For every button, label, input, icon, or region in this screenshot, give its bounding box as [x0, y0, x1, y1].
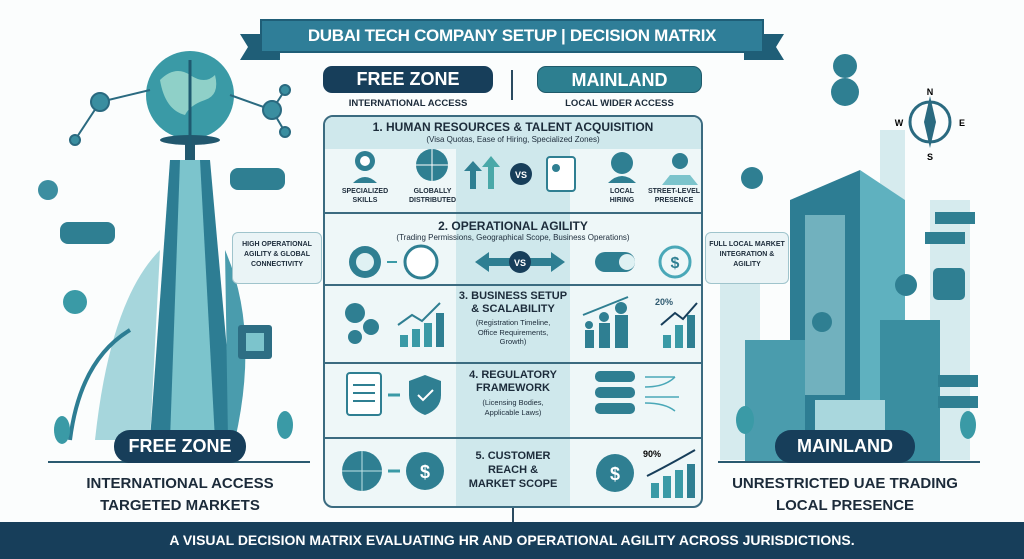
label: free zone [114, 430, 246, 463]
globe [146, 51, 234, 160]
row 3: business setup [345, 290, 698, 348]
label: mainland [775, 430, 915, 463]
header: mainland: LOCAL WIDER ACCESS [565, 98, 674, 109]
row 3: business setup: (Registration Timeline, [476, 318, 550, 327]
footer: A VISUAL DECISION MATRIX EVALUATING HR AND OPERATIONAL AGILITY ACROSS JURISDICTIONS. [169, 532, 855, 548]
callout: right [705, 232, 789, 284]
text: mainland summary: UNRESTRICTED UAE TRADING [732, 475, 958, 492]
label: free zone: FREE ZONE [128, 436, 232, 456]
header: mainland [537, 66, 702, 109]
row 4: regulatory [346, 369, 679, 416]
callout: left [232, 232, 322, 284]
footer [0, 522, 1024, 559]
pins [741, 54, 917, 332]
text: mainland summary [732, 475, 958, 514]
row 5: customer reach: 5. CUSTOMER [476, 450, 550, 462]
network nodes [70, 85, 290, 145]
compass: E [959, 118, 965, 128]
row 1: HR: SPECIALIZED SKILLS [342, 188, 388, 204]
row 2: operational agility: $ [671, 255, 680, 272]
row 1: HR: GLOBALLY DISTRIBUTED [409, 188, 456, 204]
row 4: regulatory: Applicable Laws) [485, 408, 541, 416]
header: free zone: INTERNATIONAL ACCESS [349, 98, 467, 109]
row 2: operational agility: 2. OPERATIONAL AGILITY [438, 219, 588, 233]
row 3: business setup: & SCALABILITY [471, 303, 555, 315]
row 5: customer reach: 90% [643, 449, 661, 459]
row 1: HR [342, 120, 700, 204]
tower [70, 60, 245, 440]
callout: left: HIGH OPERATIONAL AGILITY & GLOBAL CONNECTIVITY [242, 241, 312, 268]
row 3: business setup: 3. BUSINESS SETUP [459, 290, 567, 302]
text: mainland summary: LOCAL PRESENCE [776, 497, 914, 514]
compass: W [895, 118, 904, 128]
right illustration [718, 54, 980, 462]
row 4: regulatory: (Licensing Bodies, [482, 398, 544, 407]
chip [238, 325, 272, 359]
header: free zone: FREE ZONE [356, 69, 460, 89]
row 4: regulatory: FRAMEWORK [476, 382, 550, 394]
compass: S [927, 152, 933, 162]
row 3: business setup: 20% [655, 297, 673, 307]
row 5: customer reach: $ [420, 462, 430, 482]
row 2: operational agility: (Trading Permissions, Geographical Scope, Business Operations) [396, 233, 630, 242]
row 2: operational agility: VS [514, 258, 526, 268]
matrix panel [323, 115, 703, 508]
header: mainland: MAINLAND [572, 70, 668, 90]
row 1: HR: LOCAL HIRING [610, 188, 634, 204]
callout: right: FULL LOCAL MARKET INTEGRATION & AGILITY [709, 241, 785, 268]
row 5: customer reach: $ [610, 464, 620, 484]
label: mainland: MAINLAND [797, 436, 893, 456]
row 5: customer reach [342, 449, 696, 498]
compass: N [927, 87, 933, 97]
row 2: operational agility [349, 219, 692, 280]
title banner: DUBAI TECH COMPANY SETUP | DECISION MATRIX [308, 26, 716, 45]
header: free zone [323, 66, 493, 109]
text: free zone summary [86, 475, 274, 514]
text: free zone summary: INTERNATIONAL ACCESS [86, 475, 274, 492]
row 1: HR: STREET-LEVEL PRESENCE [648, 188, 700, 204]
compass [895, 87, 965, 162]
text: free zone summary: TARGETED MARKETS [100, 497, 260, 514]
row 1: HR: VS [515, 170, 527, 180]
row 3: business setup: Growth) [500, 337, 526, 346]
row 5: customer reach: MARKET SCOPE [469, 478, 557, 490]
title banner [240, 19, 784, 60]
row 3: business setup: Office Requirements, [478, 328, 548, 336]
row 1: HR: (Visa Quotas, Ease of Hiring, Specialized Zones) [426, 135, 600, 144]
row 5: customer reach: REACH & [488, 464, 538, 476]
handshakes [38, 168, 285, 244]
left illustration [38, 51, 310, 462]
row 4: regulatory: 4. REGULATORY [469, 369, 557, 381]
row 1: HR: 1. HUMAN RESOURCES & TALENT ACQUISITION [373, 120, 653, 134]
